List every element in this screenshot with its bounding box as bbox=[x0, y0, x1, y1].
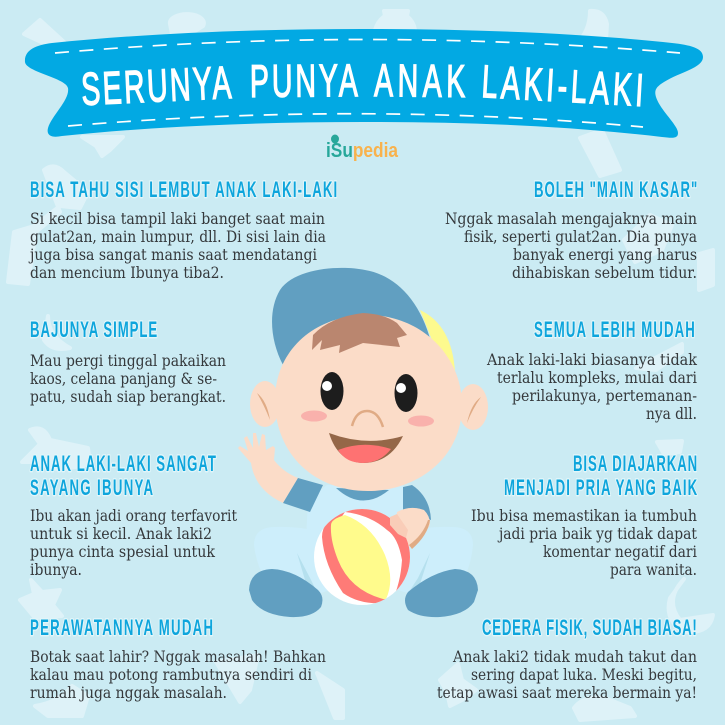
text block: Anak laki-laki sangat sayang ibunya: ibunya. bbox=[30, 561, 82, 579]
text block: Anak laki-laki sangat sayang ibunya: untuk si kecil. Anak laki2 bbox=[30, 525, 212, 543]
collar bbox=[336, 488, 389, 501]
logo wordmark: iSupedia bbox=[326, 140, 399, 162]
text block: Bisa diajarkan menjadi pria yang baik: komentar negatif dari bbox=[543, 543, 697, 561]
title: ANAK bbox=[374, 55, 466, 108]
text block: Perawatannya mudah: Botak saat lahir? Nggak masalah! Bahkan bbox=[30, 648, 326, 666]
text block: Semua lebih mudah: perilakunya, pertemanan- bbox=[512, 387, 697, 405]
text block: Bisa diajarkan menjadi pria yang baik: BISA DIAJARKAN bbox=[573, 452, 697, 476]
left sleeve bbox=[283, 478, 323, 512]
text block: Bisa diajarkan menjadi pria yang baik: MENJADI PRIA YANG BAIK bbox=[504, 476, 697, 500]
wrist shadow bbox=[409, 520, 430, 549]
cap bbox=[272, 268, 431, 365]
text block: Boleh main kasar bbox=[445, 178, 697, 282]
text block: Bisa tahu sisi lembut bbox=[28, 178, 337, 282]
text block: Perawatannya mudah: PERAWATANNYA MUDAH bbox=[30, 616, 213, 640]
title: SERUNYA bbox=[80, 57, 233, 116]
text block: Bisa diajarkan menjadi pria yang baik: para wanita. bbox=[610, 561, 697, 579]
banner bbox=[25, 29, 703, 138]
text block: Bajunya simple: Mau pergi tinggal pakaikan bbox=[30, 352, 226, 370]
logo mark bbox=[331, 134, 339, 144]
hair bbox=[312, 313, 407, 353]
text block: Semua lebih mudah: nya dll. bbox=[646, 405, 697, 423]
text block: Cedera fisik sudah biasa: Anak laki2 tidak mudah takut dan bbox=[452, 648, 697, 666]
text block: Anak laki-laki sangat sayang ibunya: ANAK LAKI-LAKI SANGAT bbox=[30, 452, 216, 476]
text block: Bisa tahu sisi lembut: gulat2an, main lumpur, dll. Di sisi lain dia bbox=[30, 228, 326, 246]
text block: Anak laki-laki sangat sayang ibunya: Ibu akan jadi orang terfavorit bbox=[30, 507, 238, 525]
fingers bbox=[390, 514, 408, 538]
illustration: baby bbox=[238, 268, 488, 617]
raised arm bbox=[238, 433, 298, 503]
text block: Boleh main kasar: Nggak masalah mengajaknya main bbox=[445, 210, 697, 228]
mouth bbox=[329, 433, 403, 463]
title bbox=[80, 55, 645, 117]
text block: Semua lebih mudah: SEMUA LEBIH MUDAH bbox=[534, 318, 695, 342]
eyes bbox=[320, 372, 418, 412]
stitching bbox=[55, 40, 680, 127]
title: LAKI-LAKI bbox=[480, 56, 645, 117]
cap brim bbox=[420, 310, 455, 372]
text block: Anak laki-laki sangat sayang ibunya: SAYANG IBUNYA bbox=[30, 476, 153, 500]
text block: Bajunya simple: BAJUNYA SIMPLE bbox=[30, 318, 157, 342]
ears bbox=[250, 381, 488, 430]
ear details bbox=[257, 393, 481, 423]
cheeks bbox=[301, 410, 434, 426]
text block: Perawatannya mudah bbox=[30, 616, 326, 702]
text block: Anak laki-laki sangat sayang ibunya bbox=[30, 452, 238, 579]
red stripe right bbox=[346, 509, 410, 591]
text block: Bisa diajarkan menjadi pria yang baik: Ibu bisa memastikan ia tumbuh bbox=[471, 507, 697, 525]
ribbon shape bbox=[25, 29, 703, 138]
text block: Semua lebih mudah: Anak laki-laki biasanya tidak bbox=[486, 351, 698, 369]
legs and body bbox=[254, 485, 473, 600]
title: PUNYA bbox=[250, 55, 358, 108]
feet bbox=[249, 569, 478, 617]
red stripe left bbox=[322, 509, 385, 603]
text block: Bisa tahu sisi lembut: juga bisa sangat manis saat mendatangi bbox=[28, 246, 317, 264]
text block: Bisa tahu sisi lembut: BISA TAHU SISI LEMBUT ANAK LAKI-LAKI bbox=[30, 178, 337, 202]
text block: Bajunya simple bbox=[30, 318, 226, 406]
text block: Perawatannya mudah: rumah juga nggak masalah. bbox=[30, 684, 227, 702]
text block: Boleh main kasar: BOLEH "MAIN KASAR" bbox=[534, 178, 697, 202]
text block: Anak laki-laki sangat sayang ibunya: punya cinta spesial untuk bbox=[30, 543, 216, 561]
inner leg shadows bbox=[297, 553, 430, 598]
text block: Bajunya simple: kaos, celana panjang & se- bbox=[30, 370, 217, 388]
text block: Bisa diajarkan menjadi pria yang baik bbox=[471, 452, 698, 579]
text block: Boleh main kasar: dihabiskan sebelum tidur. bbox=[512, 264, 697, 282]
text block: Boleh main kasar: banyak energi yang harus bbox=[513, 246, 697, 264]
yellow stripe bbox=[331, 515, 390, 599]
logo bbox=[326, 134, 399, 162]
tongue bbox=[338, 445, 391, 463]
hand bbox=[395, 508, 430, 547]
text block: Bajunya simple: patu, sudah siap berangkat. bbox=[30, 388, 226, 406]
text block: Semua lebih mudah: terlalu kompleks, mulai dari bbox=[497, 369, 697, 387]
text block: Bisa tahu sisi lembut: Si kecil bisa tampil laki banget saat main bbox=[30, 210, 325, 228]
text block: Bisa diajarkan menjadi pria yang baik: jadi pria baik yg tidak dapat bbox=[497, 525, 698, 543]
nose bbox=[352, 411, 383, 427]
text block: Cedera fisik sudah biasa: CEDERA FISIK, SUDAH BIASA! bbox=[482, 616, 697, 640]
text block: Cedera fisik sudah biasa: tetap awasi saat mereka bermain ya! bbox=[437, 684, 697, 702]
text block: Cedera fisik sudah biasa bbox=[437, 616, 697, 702]
text block: Bisa tahu sisi lembut: dan mencium Ibunya tiba2. bbox=[30, 264, 224, 282]
text block: Semua lebih mudah bbox=[486, 318, 698, 423]
text block: Boleh main kasar: fisik, seperti gulat2an. Dia punya bbox=[464, 228, 697, 246]
ball bbox=[314, 509, 410, 605]
head bbox=[275, 315, 462, 491]
text block: Cedera fisik sudah biasa: sering dapat luka. Meski begitu, bbox=[471, 666, 697, 684]
right sleeve bbox=[403, 485, 431, 520]
text block: Perawatannya mudah: kalau mau potong rambutnya sendiri di bbox=[30, 666, 312, 684]
